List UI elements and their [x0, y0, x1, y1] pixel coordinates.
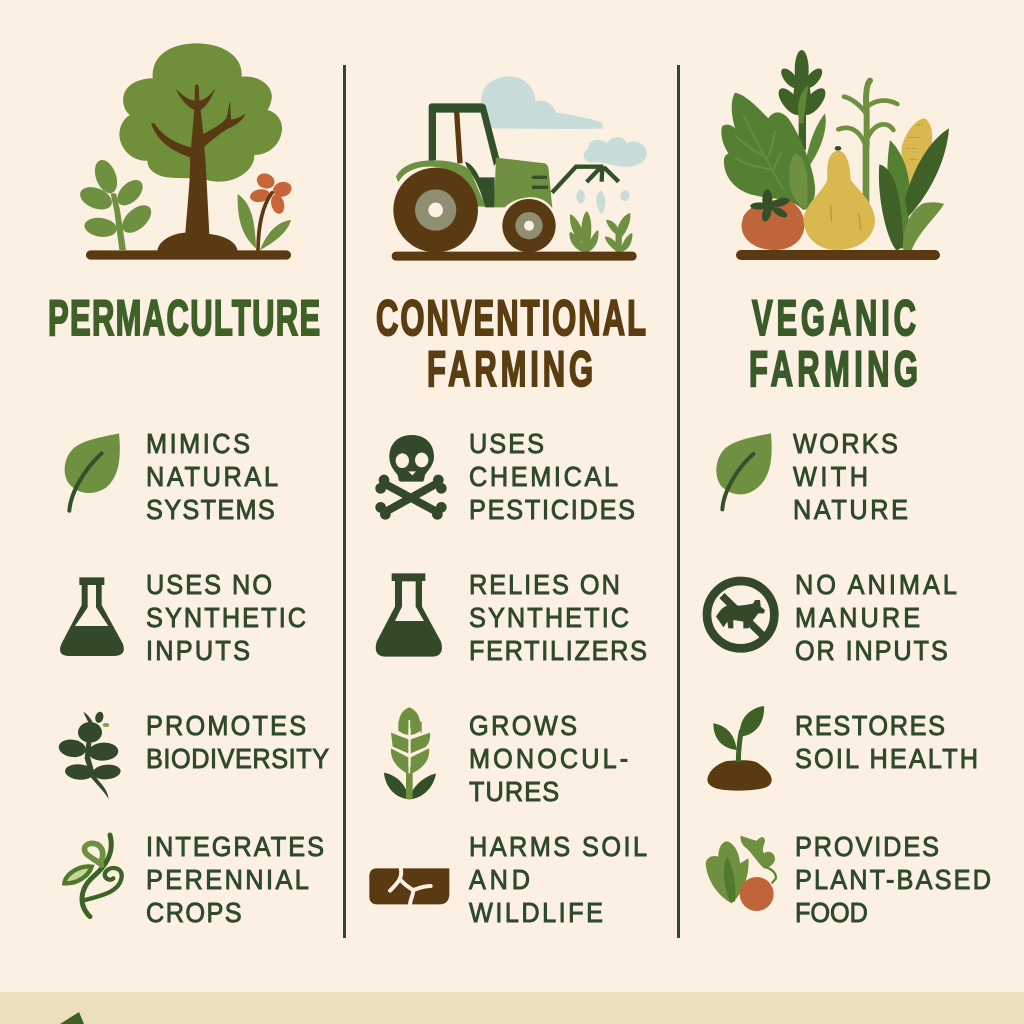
text: provides plant-based food: PROVIDES — [795, 831, 939, 862]
heading: veganic farming: FARMING — [749, 340, 918, 397]
icon: vine — [64, 835, 122, 917]
text: promotes biodiversity — [146, 710, 329, 774]
list item: uses no synthetic inputs — [60, 569, 306, 666]
text: uses chemical pesticides — [469, 428, 635, 525]
text: provides plant-based food: FOOD — [795, 897, 868, 928]
panel: conventional farming — [369, 76, 647, 928]
text: works with nature: WORKS — [793, 428, 898, 459]
list item: mimics natural systems — [65, 428, 278, 525]
icon: crop plant — [384, 707, 436, 799]
text: uses chemical pesticides: CHEMICAL — [469, 461, 618, 492]
text: harms soil and wildlife — [469, 831, 647, 928]
text: relies on synthetic fertilizers: FERTILIZERS — [469, 635, 647, 666]
list item: relies on synthetic fertilizers — [376, 569, 647, 666]
illustration: vegetables — [721, 50, 949, 260]
text: works with nature — [793, 428, 908, 525]
illustration: tractor spraying crops — [392, 76, 647, 261]
text: mimics natural systems — [146, 428, 278, 525]
list item: promotes biodiversity — [58, 710, 329, 799]
heading: conventional farming — [376, 289, 646, 397]
list item: uses chemical pesticides — [375, 428, 635, 525]
text: uses chemical pesticides: USES — [469, 428, 544, 459]
icon: flask — [60, 577, 124, 656]
icon: flask — [376, 573, 442, 657]
text: integrates perennial crops: CROPS — [146, 897, 242, 928]
text: uses no synthetic inputs: SYNTHETIC — [146, 602, 306, 633]
heading: permaculture: PERMACULTURE — [48, 289, 320, 346]
text: no animal manure or inputs: MANURE — [795, 602, 920, 633]
heading: conventional farming: CONVENTIONAL — [376, 289, 646, 346]
heading: conventional farming: FARMING — [427, 340, 593, 397]
list item: works with nature — [716, 428, 908, 525]
list item: harms soil and wildlife — [369, 831, 647, 928]
list item: restores soil health — [707, 706, 978, 791]
text: harms soil and wildlife: WILDLIFE — [469, 897, 603, 928]
text: no animal manure or inputs: NO ANIMAL — [795, 569, 957, 600]
panel: permaculture — [48, 43, 329, 928]
list item: no animal manure or inputs — [707, 569, 957, 666]
text: works with nature: WITH — [793, 461, 868, 492]
text: mimics natural systems: SYSTEMS — [146, 494, 275, 525]
text: mimics natural systems: MIMICS — [146, 428, 250, 459]
heading: veganic farming — [749, 289, 918, 397]
text: integrates perennial crops: INTEGRATES — [146, 831, 324, 862]
text: uses no synthetic inputs: USES NO — [146, 569, 272, 600]
illustration: tree and plants — [77, 43, 293, 260]
icon: no animal symbol — [707, 581, 774, 648]
text: grows monocultures: TURES — [469, 776, 559, 807]
panel: veganic farming — [706, 50, 991, 928]
text: harms soil and wildlife: AND — [469, 864, 530, 895]
text: uses no synthetic inputs — [146, 569, 306, 666]
list item: provides plant-based food — [706, 831, 991, 928]
text: integrates perennial crops — [146, 831, 324, 928]
icon: cracked soil — [369, 868, 449, 905]
text: relies on synthetic fertilizers: SYNTHETIC — [469, 602, 629, 633]
text: grows monocultures: GROWS — [469, 710, 577, 741]
text: integrates perennial crops: PERENNIAL — [146, 864, 309, 895]
text: provides plant-based food: PLANT-BASED — [795, 864, 991, 895]
icon: sprout in soil — [707, 706, 772, 791]
text: no animal manure or inputs — [795, 569, 957, 666]
text: restores soil health: SOIL HEALTH — [795, 743, 978, 774]
text: restores soil health: RESTORES — [795, 710, 945, 741]
text: no animal manure or inputs: OR INPUTS — [795, 635, 948, 666]
text: grows monocultures — [469, 710, 628, 807]
list item: grows monocultures — [384, 707, 628, 807]
text: relies on synthetic fertilizers — [469, 569, 647, 666]
text: promotes biodiversity: BIODIVERSITY — [146, 743, 329, 774]
text: works with nature: NATURE — [793, 494, 908, 525]
text: relies on synthetic fertilizers: RELIES ON — [469, 569, 620, 600]
icon: vegetables — [706, 836, 776, 911]
text: uses no synthetic inputs: INPUTS — [146, 635, 250, 666]
text: mimics natural systems: NATURAL — [146, 461, 278, 492]
icon: leaf — [65, 433, 120, 511]
text: grows monocultures: MONOCUL- — [469, 743, 628, 774]
text: uses chemical pesticides: PESTICIDES — [469, 494, 635, 525]
text: promotes biodiversity: PROMOTES — [146, 710, 306, 741]
list item: integrates perennial crops — [64, 831, 324, 928]
icon: leafy sprig — [58, 711, 121, 799]
icon: skull and crossbones — [375, 435, 447, 520]
icon: leaf — [716, 433, 772, 509]
text: harms soil and wildlife: HARMS SOIL — [469, 831, 647, 862]
text: provides plant-based food — [795, 831, 991, 928]
footer band — [0, 992, 1024, 1024]
heading: veganic farming: VEGANIC — [752, 289, 916, 346]
text: restores soil health — [795, 710, 978, 774]
